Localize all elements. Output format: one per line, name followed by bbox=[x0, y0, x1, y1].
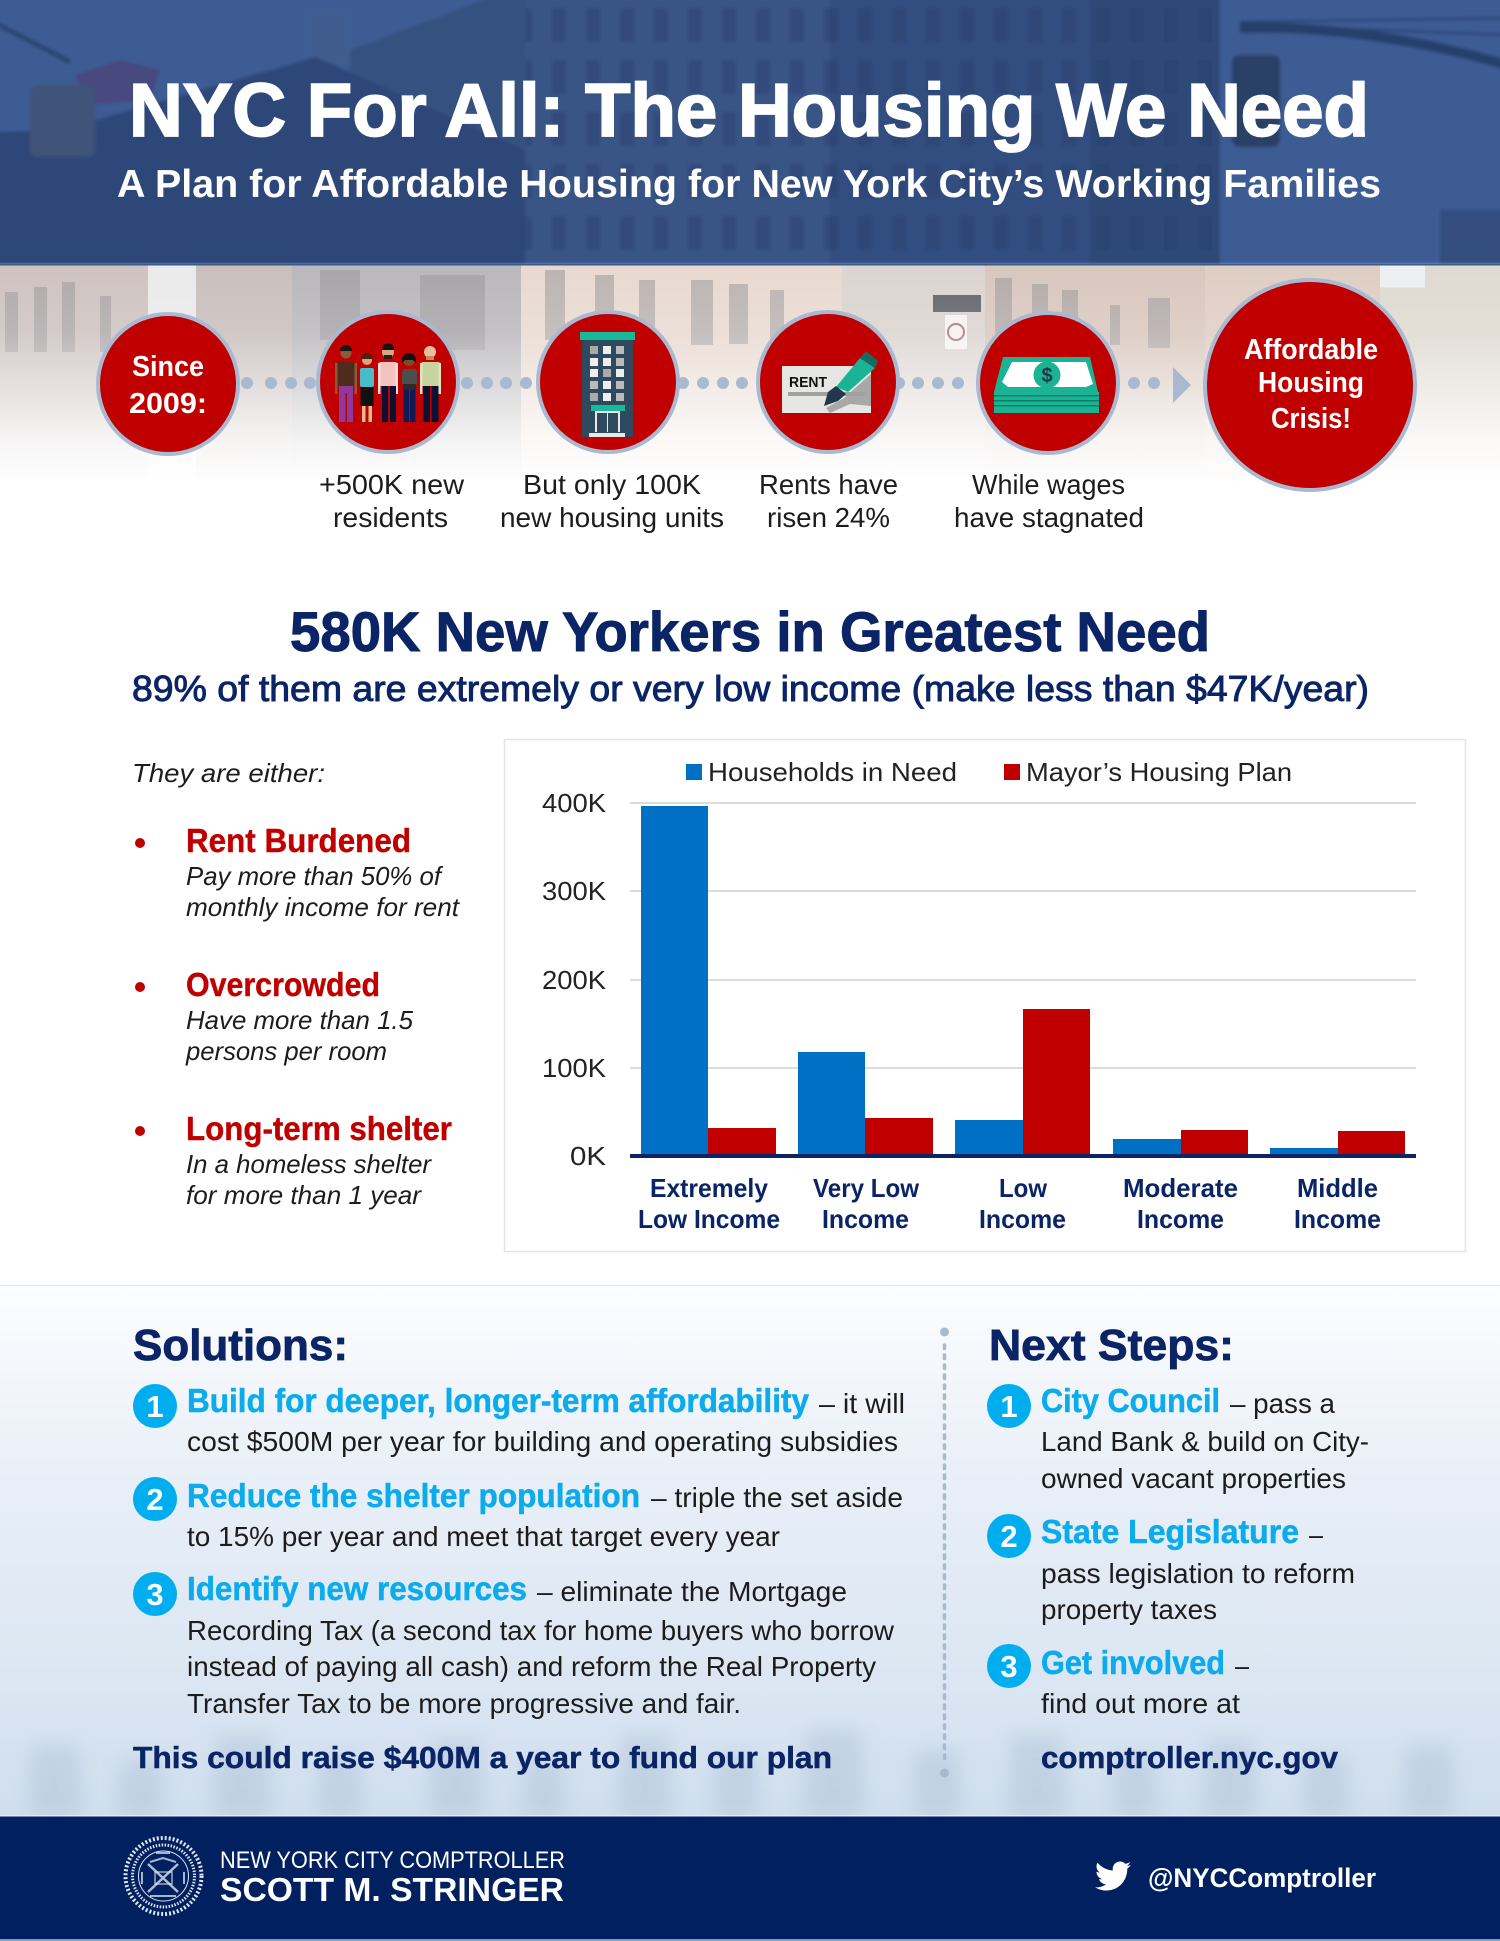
category labels: Extremely bbox=[650, 1173, 769, 1203]
item: long-term shelter bbox=[135, 1110, 452, 1210]
circle: affordable housing crisis: Crisis! bbox=[1271, 403, 1351, 435]
comptroller name: SCOTT M. STRINGER bbox=[220, 1871, 564, 1908]
comptroller name: NEW YORK CITY COMPTROLLER bbox=[220, 1847, 565, 1874]
step 2: pass legislation to reform bbox=[1041, 1558, 1355, 1589]
step 3: Get involved bbox=[1041, 1644, 1225, 1681]
step 3: 3 bbox=[1000, 1649, 1018, 1684]
photo windows bbox=[5, 270, 1170, 352]
dotted connector: residents to housing bbox=[461, 377, 532, 389]
bars: extremely low income bbox=[641, 806, 776, 1156]
crowd silhouettes bbox=[30, 1730, 1453, 1816]
street signs bbox=[933, 295, 981, 349]
figure 3 bbox=[378, 343, 398, 422]
item: rent burdened bbox=[135, 822, 461, 922]
arrow bbox=[1173, 367, 1191, 403]
legend: Mayor’s Housing Plan bbox=[1026, 757, 1292, 787]
solution 2: Reduce the shelter population bbox=[187, 1477, 640, 1514]
step 1: City Council bbox=[1041, 1382, 1220, 1419]
category labels: Moderate bbox=[1123, 1173, 1238, 1203]
label: wages stagnated: have stagnated bbox=[954, 502, 1144, 533]
step 2 bbox=[987, 1513, 1355, 1625]
item: overcrowded bbox=[135, 966, 414, 1066]
gridlines bbox=[630, 803, 1416, 1068]
solution 2: 2 bbox=[146, 1482, 164, 1517]
solution 3 bbox=[133, 1570, 895, 1719]
bars: low income bbox=[955, 1009, 1090, 1156]
label: rents risen bbox=[759, 469, 898, 533]
label: new residents bbox=[319, 469, 465, 533]
solution 2: to 15% per year and meet that target every year bbox=[187, 1521, 780, 1552]
step 3: – bbox=[1235, 1650, 1249, 1681]
section heading: 580K New Yorkers in Greatest Need bbox=[290, 600, 1210, 663]
solution 2 bbox=[133, 1477, 903, 1552]
solution 1 bbox=[133, 1382, 905, 1457]
circle: since 2009: Since bbox=[132, 351, 204, 383]
solution 3: Recording Tax (a second tax for home buyers who borrow bbox=[187, 1615, 895, 1646]
label: wages stagnated: While wages bbox=[972, 469, 1125, 500]
solution 1: 1 bbox=[146, 1389, 164, 1424]
bars: middle income bbox=[1270, 1131, 1405, 1156]
dotted connector: rent to wages bbox=[893, 377, 964, 389]
solution 3: Identify new resources bbox=[187, 1570, 527, 1607]
figure 4 bbox=[402, 353, 417, 422]
solution 1: Build for deeper, longer-term affordability bbox=[187, 1382, 810, 1419]
label: rents risen: risen 24% bbox=[767, 502, 890, 533]
y axis labels: 300K bbox=[542, 876, 607, 906]
label: new residents: +500K new bbox=[319, 469, 465, 500]
y axis labels: 0K bbox=[570, 1141, 607, 1171]
dotted connector: wages to crisis bbox=[1128, 377, 1160, 389]
item: long-term shelter: Long-term shelter bbox=[186, 1110, 452, 1147]
solution 3: Transfer Tax to be more progressive and fair. bbox=[187, 1688, 741, 1719]
circle: affordable housing crisis: Affordable bbox=[1244, 334, 1378, 366]
circle: affordable housing crisis bbox=[1205, 280, 1415, 490]
step 2: 2 bbox=[1000, 1519, 1018, 1554]
step 1: – pass a bbox=[1230, 1388, 1335, 1419]
item: long-term shelter: for more than 1 year bbox=[186, 1180, 422, 1210]
step 2: – bbox=[1309, 1519, 1323, 1550]
x axis bbox=[630, 1154, 1416, 1158]
section subheading: 89% of them are extremely or very low income (make less than $47K/year) bbox=[132, 668, 1369, 709]
category labels: Income bbox=[1137, 1204, 1224, 1234]
item: rent burdened: Rent Burdened bbox=[186, 822, 411, 859]
funding callout: This could raise $400M a year to fund our plan bbox=[133, 1740, 832, 1775]
icon: rent check and pen bbox=[758, 312, 898, 452]
step 2: State Legislature bbox=[1041, 1513, 1299, 1550]
step 3 bbox=[987, 1644, 1249, 1719]
divider bbox=[940, 1328, 949, 1778]
figure 2 bbox=[360, 353, 374, 422]
circle: since 2009: 2009: bbox=[129, 388, 207, 420]
item: long-term shelter: In a homeless shelter bbox=[186, 1149, 432, 1179]
label: rents risen: Rents have bbox=[759, 469, 898, 500]
title: NYC For All: The Housing We Need bbox=[129, 68, 1369, 152]
bar chart bbox=[504, 740, 1466, 1252]
icon: city seal bbox=[126, 1838, 202, 1914]
twitter handle: @NYCComptroller bbox=[1148, 1863, 1376, 1893]
category labels: Low bbox=[999, 1173, 1048, 1203]
bars: very low income bbox=[798, 1052, 933, 1156]
icon: residents bbox=[318, 312, 458, 452]
icon: twitter bird bbox=[1095, 1861, 1131, 1891]
label: new housing units: But only 100K bbox=[523, 469, 701, 500]
subtitle: A Plan for Affordable Housing for New York City’s Working Families bbox=[117, 163, 1381, 206]
figure 1 bbox=[335, 345, 357, 422]
dotted connector: housing to rent bbox=[677, 377, 748, 389]
dotted connector: since to residents bbox=[241, 377, 316, 389]
item: rent burdened: Pay more than 50% of bbox=[186, 861, 444, 891]
step 1: owned vacant properties bbox=[1041, 1463, 1346, 1494]
solution 1: – it will bbox=[819, 1388, 905, 1419]
circle: affordable housing crisis: Housing bbox=[1258, 367, 1364, 399]
legend: Households in Need bbox=[708, 757, 957, 787]
solutions heading: Solutions: bbox=[133, 1321, 348, 1370]
y axis labels: 200K bbox=[542, 965, 607, 995]
website: comptroller.nyc.gov bbox=[1041, 1740, 1339, 1775]
step 3: find out more at bbox=[1041, 1688, 1240, 1719]
icon: rent check and pen: RENT bbox=[789, 374, 827, 391]
step 1: Land Bank & build on City- bbox=[1041, 1426, 1369, 1457]
solution 3: – eliminate the Mortgage bbox=[537, 1576, 847, 1607]
category labels bbox=[638, 1173, 1381, 1234]
figure 5 bbox=[420, 346, 441, 422]
item: overcrowded: Overcrowded bbox=[186, 966, 380, 1003]
y axis labels bbox=[542, 788, 607, 1171]
panel: solutions bbox=[133, 1321, 905, 1775]
category labels: Low Income bbox=[638, 1204, 780, 1234]
category labels: Middle bbox=[1297, 1173, 1378, 1203]
bottom panel background bbox=[0, 1285, 1500, 1816]
icon: housing building bbox=[538, 312, 678, 452]
solution 3: instead of paying all cash) and reform the Real Property bbox=[187, 1651, 876, 1682]
step 2: property taxes bbox=[1041, 1594, 1217, 1625]
label: new housing units: new housing units bbox=[500, 502, 724, 533]
intro text: They are either: bbox=[132, 758, 325, 788]
category labels: Income bbox=[822, 1204, 909, 1234]
icon: money stack: $ bbox=[1041, 365, 1053, 387]
bars: moderate income bbox=[1113, 1130, 1248, 1156]
label: wages stagnated bbox=[954, 469, 1144, 533]
y axis labels: 400K bbox=[542, 788, 607, 818]
panel: who is in need bbox=[132, 758, 461, 1210]
label: new residents: residents bbox=[333, 502, 448, 533]
comptroller name bbox=[220, 1847, 565, 1908]
item: overcrowded: Have more than 1.5 bbox=[186, 1005, 414, 1035]
item: rent burdened: monthly income for rent bbox=[186, 892, 461, 922]
step 1 bbox=[987, 1382, 1369, 1494]
panel: header band bbox=[0, 0, 1500, 266]
building windows bbox=[590, 346, 624, 401]
header photo background bbox=[0, 0, 1500, 265]
solution 3: 3 bbox=[146, 1577, 164, 1612]
header bottom edge mask bbox=[0, 264, 1500, 266]
footer edge mask bbox=[0, 1800, 1, 1801]
category labels: Very Low bbox=[813, 1173, 920, 1203]
category labels: Income bbox=[1294, 1204, 1381, 1234]
next steps heading: Next Steps: bbox=[989, 1321, 1234, 1370]
solution 1: cost $500M per year for building and operating subsidies bbox=[187, 1426, 898, 1457]
panel: next steps bbox=[987, 1321, 1369, 1775]
legend bbox=[686, 757, 1292, 787]
item: overcrowded: persons per room bbox=[185, 1036, 387, 1066]
label: new housing units bbox=[500, 469, 724, 533]
icon: money stack bbox=[978, 313, 1118, 453]
photo strip background bbox=[0, 266, 1500, 490]
step 1: 1 bbox=[1000, 1389, 1018, 1424]
y axis labels: 100K bbox=[542, 1053, 607, 1083]
circle: since 2009 bbox=[98, 314, 238, 454]
category labels: Income bbox=[979, 1204, 1066, 1234]
footer bbox=[0, 1815, 1500, 1941]
solution 2: – triple the set aside bbox=[651, 1482, 903, 1513]
